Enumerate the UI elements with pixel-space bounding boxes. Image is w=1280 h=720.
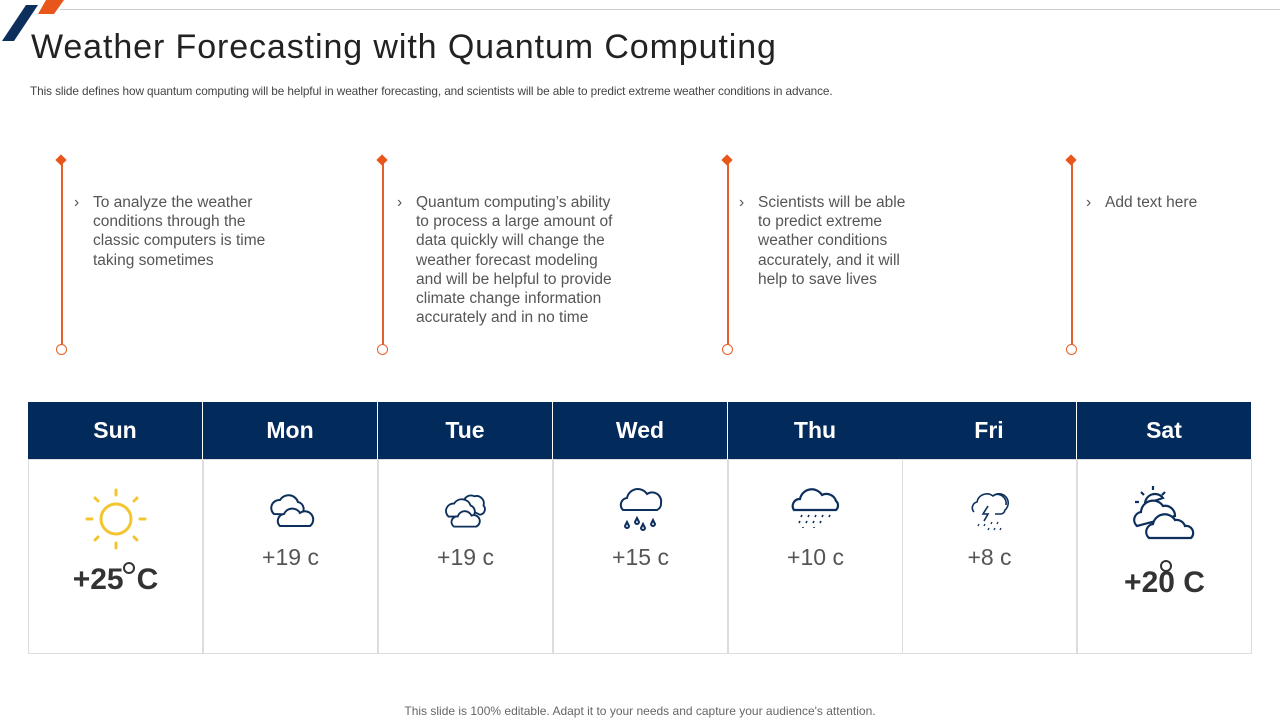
temp Sun: +25 C [73, 563, 158, 596]
timeline 2 [376, 154, 388, 355]
timeline 4 [1065, 154, 1077, 355]
cell Sat [1077, 459, 1252, 654]
temp Fri: +8 c [967, 544, 1012, 570]
header Fri: Fri [974, 417, 1004, 443]
icon: sun behind clouds [1133, 486, 1194, 540]
cell Fri [902, 459, 1077, 654]
text: › [397, 194, 402, 211]
header Sun: Sun [93, 417, 137, 443]
icon: sun [86, 488, 146, 550]
temp Sat: C [1183, 566, 1205, 599]
title: Weather Forecasting with Quantum Computing [31, 28, 777, 66]
text 2: Quantum computing’s ability to process a large amount of data quickly will change the weather forecast modeling and will be helpful to provide climate change information accurately and in no time [416, 194, 612, 326]
text: › [1086, 194, 1091, 211]
text: › [74, 194, 79, 211]
icon: thunderstorm [972, 493, 1009, 530]
header Sun [28, 402, 202, 459]
temp Tue: +19 c [437, 544, 494, 570]
cell Sun [28, 459, 203, 654]
icon: clouds [445, 494, 486, 528]
temp Wed: +15 c [612, 544, 669, 570]
header Tue: Tue [445, 417, 485, 443]
cell Tue [378, 459, 553, 654]
icon: heavy rain [792, 488, 840, 528]
temp Sat [1124, 560, 1205, 599]
footer note: This slide is 100% editable. Adapt it to your needs and capture your audience's attention. [404, 704, 876, 718]
header Sat: Sat [1146, 417, 1182, 443]
icon: rain [620, 488, 662, 531]
subtitle: This slide defines how quantum computing will be helpful in weather forecasting, and scientists will be able to predict extreme weather conditions in advance. [30, 84, 833, 98]
text 3: Scientists will be able to predict extreme weather conditions accurately, and it will help to save lives [758, 194, 905, 288]
header Sat [1077, 402, 1251, 459]
timeline 1 [55, 154, 67, 355]
cell Wed [553, 459, 728, 654]
text 4: Add text here [1105, 194, 1197, 211]
header Mon: Mon [266, 417, 314, 443]
cell Mon [203, 459, 378, 654]
text: › [739, 194, 744, 211]
temp Thu: +10 c [787, 544, 844, 570]
temp Mon: +19 c [262, 544, 319, 570]
temp Sat: +20 [1124, 566, 1175, 599]
header Mon [203, 402, 377, 459]
header Fri [902, 402, 1076, 459]
header Wed [553, 402, 727, 459]
timeline 3 [721, 154, 733, 355]
icon: clouds [270, 494, 314, 527]
header Thu [728, 402, 902, 459]
header Tue [378, 402, 552, 459]
header Wed: Wed [616, 417, 664, 443]
logo mark [2, 0, 64, 41]
text 1: To analyze the weather conditions through the classic computers is time taking sometimes [93, 194, 265, 269]
cell Thu [728, 459, 903, 654]
header Thu: Thu [794, 417, 836, 443]
